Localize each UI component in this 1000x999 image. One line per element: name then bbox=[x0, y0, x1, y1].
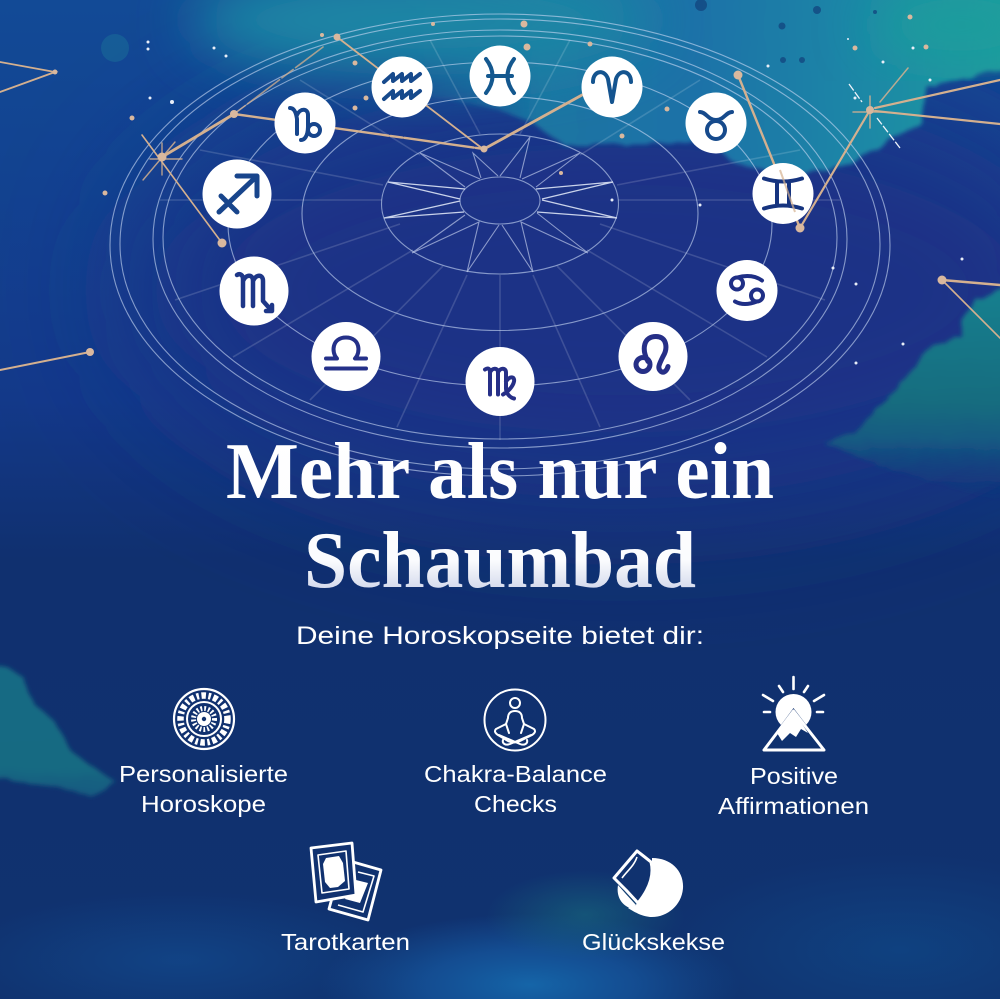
constellation overlay on gemini bbox=[780, 170, 795, 212]
icon: aries bbox=[593, 72, 631, 102]
icon: pisces bbox=[486, 59, 514, 93]
stars and dust bbox=[52, 14, 946, 356]
label: Glückskekse bbox=[582, 929, 725, 955]
icon: leo bbox=[636, 336, 668, 372]
label: Positive bbox=[750, 763, 838, 789]
label: Chakra-Balance bbox=[424, 761, 607, 787]
icon: libra bbox=[326, 338, 366, 368]
feature: Tarotkarten bbox=[281, 843, 410, 955]
star rays: white dashes bbox=[849, 84, 900, 148]
constellation lines bbox=[0, 37, 1000, 370]
icon: cancer bbox=[731, 276, 763, 304]
subtitle: Deine Horoskopseite bietet dir: bbox=[296, 622, 704, 650]
feature: Positive Affirmationen bbox=[718, 677, 869, 819]
title bbox=[226, 426, 774, 605]
label: Tarotkarten bbox=[281, 929, 410, 955]
icon: capricorn bbox=[290, 108, 320, 140]
label: Horoskope bbox=[141, 791, 266, 817]
label bbox=[718, 763, 869, 819]
label bbox=[119, 761, 288, 817]
icon: sagittarius bbox=[219, 176, 257, 212]
feature: Glückskekse bbox=[582, 851, 725, 955]
icon: horoscope wheel bbox=[174, 689, 234, 749]
icon: aquarius bbox=[384, 74, 420, 99]
label: Checks bbox=[474, 791, 557, 817]
icon: scorpio bbox=[237, 274, 272, 311]
label bbox=[424, 761, 607, 817]
icon: gemini bbox=[764, 178, 802, 208]
icon: sun over mountain bbox=[761, 677, 827, 752]
title: Mehr als nur ein bbox=[226, 426, 774, 516]
label: Personalisierte bbox=[119, 761, 288, 787]
zodiac glyphs bbox=[219, 59, 802, 398]
title: Schaumbad bbox=[304, 515, 696, 605]
icon: meditating figure bbox=[484, 690, 546, 750]
feature: Chakra-Balance Checks bbox=[424, 690, 607, 817]
icon: fortune cookie bbox=[614, 851, 683, 917]
icon: virgo bbox=[485, 368, 514, 398]
zodiac sign circles bbox=[202, 46, 814, 416]
label: Affirmationen bbox=[718, 793, 869, 819]
icon: taurus bbox=[700, 112, 732, 139]
zodiac wheel lines bbox=[110, 14, 890, 476]
feature: Personalisierte Horoskope bbox=[119, 689, 288, 817]
icon: tarot cards bbox=[311, 843, 381, 920]
